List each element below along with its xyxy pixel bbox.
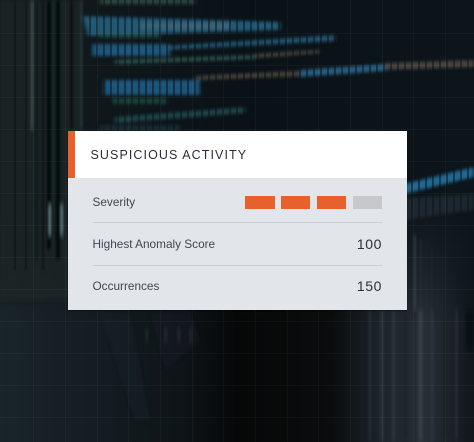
left vertical streaks [0, 0, 83, 300]
orange accent bar [68, 131, 74, 178]
value: occurrences: 150 [357, 278, 382, 294]
label: highest anomaly score: Highest Anomaly Score [92, 237, 215, 251]
severity segment 1 [245, 196, 274, 209]
blue and tan data streaks [82, 0, 474, 220]
heading: SUSPICIOUS ACTIVITY [90, 148, 247, 162]
card header [68, 131, 406, 178]
severity segment 4 empty [352, 196, 382, 209]
severity segment 2 [281, 196, 310, 209]
label: severity: Severity [92, 195, 135, 209]
lower faded strands [100, 235, 474, 442]
severity meter [245, 196, 382, 209]
panel: suspicious activity card [68, 131, 406, 310]
label: occurrences: Occurrences [92, 279, 159, 293]
severity segment 3 [317, 196, 346, 209]
value: highest anomaly score: 100 [357, 236, 382, 252]
